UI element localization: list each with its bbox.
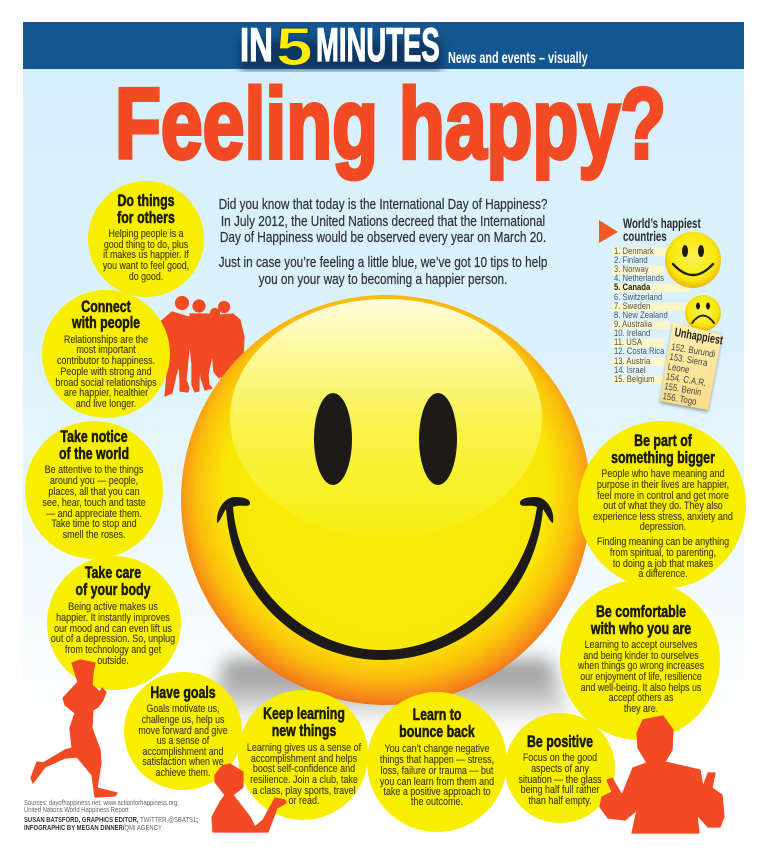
tip: be positive: than half empty. (528, 795, 592, 807)
tip: be comfortable with who you are: when things go wrong increases (577, 660, 704, 672)
note: unhappiest countries (660, 322, 724, 412)
tip: have goals: Goals motivate us, (146, 703, 220, 715)
masthead banner: IN (240, 18, 273, 71)
intro text: Did you know that today is the International Day of Happiness? (219, 196, 547, 212)
tip: connect with people: with people (71, 314, 140, 333)
icon: small sad face (685, 295, 721, 331)
tip: do things for others: it makes us happier. If (103, 249, 189, 261)
tip: keep learning new things: Learning gives us a sense of (247, 742, 361, 754)
tip: learn to bounce back: loss, failure or trauma — but (381, 765, 494, 777)
tip: be comfortable with who you are: accept others as (609, 692, 673, 704)
tip: take care of your body: our mood and can even lift us (54, 623, 172, 635)
tip: learn to bounce back (367, 692, 507, 832)
tip: connect with people: broad social relationships (55, 377, 157, 389)
happiest countries ranking: World’s happiest (623, 217, 701, 231)
intro text: Just in case you’re feeling a little blue, we’ve got 10 tips to help (219, 254, 547, 270)
tip: keep learning new things: or read. (289, 795, 319, 807)
tip: connect with people (42, 290, 170, 418)
tip: be part of something bigger: experience less stress, anxiety and (593, 511, 733, 523)
silhouette: person with thumbs up (600, 716, 724, 833)
tip: be comfortable with who you are (560, 580, 720, 740)
tip: be part of something bigger: purpose in their lives are happier, (597, 479, 729, 491)
tip: have goals: move forward and give (138, 725, 228, 737)
sky background panel (23, 68, 744, 768)
source credits: SUSAN BATSFORD, GRAPHICS EDITOR, TWITTER @SBATS1; (24, 817, 198, 824)
tip: have goals: challenge us, help us (142, 714, 224, 726)
tip: be part of something bigger: to doing a job that makes (613, 558, 713, 570)
happiest countries ranking: 7. Sweden (614, 300, 650, 311)
tip: do things for others: for others (117, 209, 175, 228)
tip: take care of your body: Being active makes us (68, 601, 158, 613)
tip: be part of something bigger: Finding meaning can be anything (597, 536, 729, 548)
tip: do things for others: do good. (129, 271, 163, 283)
tip: keep learning new things: boost self-confidence and (253, 763, 355, 775)
tip: have goals (124, 672, 242, 790)
tip: take notice of the world: around you — people, (50, 475, 138, 487)
tip: learn to bounce back: you can learn from them and (380, 776, 494, 788)
happiest countries ranking: countries (623, 230, 667, 244)
happiest countries ranking: 8. New Zealand (614, 309, 668, 320)
tip: be comfortable with who you are: Be comfortable (596, 603, 686, 622)
tip: be comfortable with who you are: and well-being. It also helps us (581, 682, 701, 694)
tip: be comfortable with who you are: and being kinder to ourselves (583, 650, 699, 662)
happiest countries ranking: 5. Canada (614, 281, 650, 292)
tip: connect with people: most important (76, 344, 136, 356)
source credits (24, 800, 198, 832)
source credits: INFOGRAPHIC BY MEGAN DINNER/QMI AGENCY (24, 825, 162, 832)
tip: keep learning new things: a class, play sports, travel (252, 785, 356, 797)
tip: take notice of the world: Take notice (60, 428, 128, 447)
tip: be part of something bigger (578, 421, 746, 589)
happiest countries ranking: 4. Netherlands (614, 272, 664, 283)
happiest countries ranking: 2. Finland (614, 254, 648, 265)
note: unhappiest countries: 155. Benin (663, 380, 702, 398)
tip: be part of something bigger: People who have meaning and (601, 468, 725, 480)
tip: take notice of the world: smell the roses. (63, 529, 125, 541)
tip: be part of something bigger: depression. (640, 521, 686, 533)
masthead banner: News and events – visually (448, 49, 588, 66)
tip: have goals: achieve them. (156, 767, 210, 779)
intro text: you on your way to becoming a happier person. (259, 271, 507, 287)
note: unhappiest countries: Leone (667, 361, 690, 375)
masthead banner: MINUTES (316, 19, 440, 72)
tip: learn to bounce back: take a positive approach to (383, 786, 491, 798)
tip: be positive: aspects of any (531, 763, 590, 775)
happiest countries ranking: 14. Israel (614, 364, 646, 375)
tip: learn to bounce back: bounce back (399, 723, 476, 742)
tip: take notice of the world: see, hear, touch and taste (42, 497, 146, 509)
happiest countries ranking: 6. Switzerland (614, 291, 662, 302)
tip: learn to bounce back: You can’t change negative (385, 743, 490, 755)
tip: do things for others: Helping people is a (108, 228, 184, 240)
tip: do things for others: you want to feel good, (103, 260, 189, 272)
note: unhappiest countries: Unhappiest (673, 326, 724, 348)
happiest countries ranking: 10. Ireland (614, 327, 650, 338)
intro text: Day of Happiness would be observed every year on March 20. (220, 229, 546, 245)
tip: connect with people: contributor to happiness. (57, 355, 155, 367)
tip: be positive (505, 713, 615, 823)
tip: be comfortable with who you are: Learning to accept ourselves (585, 639, 697, 651)
tip: take care of your body: of your body (76, 581, 151, 600)
tip: have goals: satisfaction when we (142, 756, 224, 768)
tip: be part of something bigger: out of what they do. They also (603, 500, 723, 512)
tip: connect with people: Relationships are the (64, 334, 148, 346)
tip: take care of your body: from technology and get (65, 644, 161, 656)
tip: take care of your body: out of a depression. So, unplug (51, 633, 175, 645)
tip: be comfortable with who you are: they are. (624, 703, 658, 715)
silhouette: person reading (212, 764, 286, 832)
tip: do things for others (88, 181, 204, 297)
tip: take notice of the world: Be attentive to the things (45, 464, 143, 476)
source credits: United Nations World Happiness Report (24, 807, 129, 814)
masthead banner (23, 22, 744, 72)
tip: connect with people: are happier, healthier (64, 387, 149, 399)
tip: be part of something bigger: something bigger (611, 449, 715, 468)
tip: be positive: being half full rather (521, 784, 600, 796)
happiest countries ranking: 11. USA (614, 336, 642, 347)
happiest countries ranking: 12. Costa Rica (614, 345, 664, 356)
happiest countries ranking: 3. Norway (614, 263, 649, 274)
tip: be comfortable with who you are: our enjoyment of life, resilience (580, 671, 702, 683)
happiest countries ranking: 15. Belgium (614, 373, 655, 384)
tip: connect with people: and live longer. (76, 398, 136, 410)
tip: learn to bounce back: the outcome. (411, 796, 463, 808)
tip: be positive: situation — the glass (518, 774, 602, 786)
tip: be comfortable with who you are: with who you are (590, 620, 691, 639)
tip: keep learning new things: accomplishment and helps (251, 753, 357, 765)
tip: be part of something bigger: Be part of (634, 432, 692, 451)
tip: be part of something bigger: feel more in control and get more (597, 490, 729, 502)
happiest countries ranking: 13. Austria (614, 355, 650, 366)
tip: connect with people: People with strong and (60, 366, 152, 378)
tip: take notice of the world: places, all that you can (48, 486, 140, 498)
tip: take notice of the world: of the world (59, 445, 129, 464)
tip: be part of something bigger: from spiritual, to parenting, (610, 547, 716, 559)
source credits: Sources: dayofhappiness.net; www.actionforhappiness.org; (24, 800, 179, 807)
icon: large smiley face (181, 295, 591, 705)
tip: keep learning new things: new things (272, 722, 336, 741)
note: unhappiest countries: 153. Sierra (669, 351, 709, 368)
tip: do things for others: Do things (117, 192, 175, 211)
note: unhappiest countries: 154. C.A.R. (665, 371, 707, 388)
tip: take care of your body (47, 556, 181, 690)
tip: take notice of the world: Take time to stop and (51, 518, 137, 530)
happiest countries ranking (599, 217, 701, 384)
note: unhappiest countries: 152. Burundi (670, 341, 716, 360)
tip: take care of your body: outside. (97, 655, 129, 667)
note: unhappiest countries: 156. Togo (662, 390, 698, 407)
tip: be positive: Focus on the good (523, 752, 597, 764)
silhouette: runner (31, 660, 117, 797)
tip: have goals: accomplishment and (143, 746, 223, 758)
tip: connect with people: Connect (81, 298, 131, 317)
tip: be positive: Be positive (527, 733, 593, 752)
icon: small happy face (665, 232, 721, 288)
intro text (219, 196, 547, 287)
tip: have goals: Have goals (150, 684, 216, 703)
tip: take notice of the world: — and appreciate them. (46, 508, 142, 520)
tip: keep learning new things: resilience. Join a club, take (250, 774, 358, 786)
tip: take care of your body: happier. It instantly improves (56, 612, 170, 624)
tip: keep learning new things (238, 690, 368, 820)
tip: take notice of the world (25, 421, 163, 559)
silhouette: group of friends (158, 296, 244, 396)
arrow marker (599, 220, 618, 243)
tip: do things for others: good thing to do, plus (104, 239, 188, 251)
happiest countries ranking: 1. Denmark (614, 245, 654, 256)
tip: be part of something bigger: a difference. (638, 568, 688, 580)
tip: have goals: us a sense of (157, 735, 209, 747)
tip: keep learning new things: Keep learning (263, 705, 345, 724)
intro text: In July 2012, the United Nations decreed that the International (221, 213, 545, 229)
masthead banner: 5 (276, 16, 313, 77)
tip: learn to bounce back: Learn to (413, 706, 461, 725)
tip: learn to bounce back: things that happen — stress, (380, 754, 494, 766)
floor shadow under smiley (205, 660, 575, 735)
happiest countries ranking: 9. Australia (614, 318, 652, 329)
tip: take care of your body: Take care (85, 564, 141, 583)
